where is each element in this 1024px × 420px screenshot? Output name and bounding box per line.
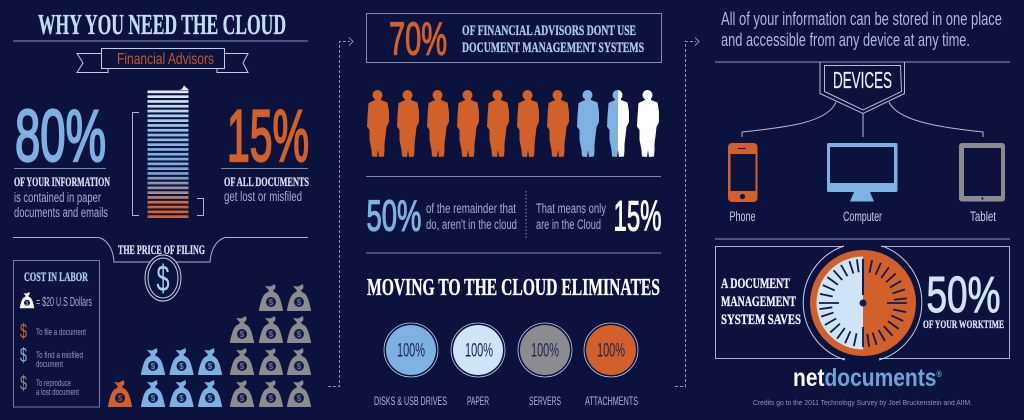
legend: cost in labor: document (36, 359, 63, 369)
text block: document management system saves: MANAGEMENT (721, 294, 796, 310)
badge: disks and usb drives: 100% (397, 340, 425, 362)
text block: document management system saves (721, 276, 801, 328)
chart: people pictogram (367, 90, 659, 157)
icon: dollar medallion: $ (156, 258, 170, 299)
stat: only 15 percent (536, 192, 662, 240)
bags: gray: $ (269, 298, 274, 307)
bags: gray: $ (240, 394, 245, 403)
heading tab: the price of filing: THE PRICE OF FILING (118, 242, 205, 257)
icon: tablet: Tablet (970, 209, 996, 224)
legend: cost in labor: $ (20, 345, 27, 367)
stat: 50 percent of remainder: 50% (366, 192, 422, 240)
stat: 80 percent: 80% (15, 96, 106, 177)
legend: cost in labor: = $20 U.S Dollars (36, 295, 92, 309)
badge: servers: SERVERS (529, 394, 561, 408)
callout: 70 percent: 70% (389, 12, 447, 64)
icon: clock (803, 246, 922, 360)
legend: cost in labor (14, 260, 100, 407)
connector lines to devices (742, 102, 983, 137)
heading badge: devices: DEVICES (833, 67, 892, 93)
credits: Credits go to the 2011 Technology Survey by Joel Bruckenstein and AIIM. (753, 400, 972, 407)
legend: cost in labor: To file a document (36, 327, 86, 337)
stat: 15 percent: OF ALL DOCUMENTS (224, 174, 309, 189)
panel: devices (715, 8, 1010, 239)
bags: gray: $ (297, 298, 302, 307)
legend: cost in labor: COST IN LABOR (24, 269, 88, 284)
bags: gray: $ (240, 362, 245, 371)
icon: tablet (959, 143, 1005, 224)
heading tab: the price of filing (13, 238, 308, 262)
stat: 15 percent: get lost or misfiled (224, 189, 302, 204)
stat: 50 percent of remainder: do, aren't in the cloud (426, 217, 517, 232)
icon: white money bag (20, 292, 34, 308)
bag: orange (108, 380, 132, 407)
stat: 15 percent: 15% (227, 96, 309, 177)
badge: disks and usb drives (374, 323, 447, 408)
callout: 70 percent: OF FINANCIAL ADVISORS DONT USE (462, 23, 636, 39)
stat: 80 percent (14, 96, 110, 220)
legend: cost in labor: $ (20, 373, 27, 395)
bags: blue: $ (151, 362, 156, 371)
bags: gray: $ (297, 394, 302, 403)
badge: servers (518, 323, 572, 408)
logo: netdocuments: netdocuments (793, 364, 958, 392)
text block: document management system saves: SYSTEM SAVES (721, 312, 801, 328)
legend: cost in labor: a lost document (36, 387, 79, 397)
stat: 80 percent: OF YOUR INFORMATION (14, 174, 110, 189)
stat: only 15 percent: are in the Cloud (536, 217, 601, 232)
bags: gray: $ (240, 330, 245, 339)
banner: financial advisors: Financial Advisors (117, 51, 214, 68)
bags: blue: $ (179, 362, 184, 371)
arrow: center to right connector (675, 38, 699, 386)
panel: why you need the cloud (13, 10, 309, 220)
badge: paper: PAPER (467, 394, 489, 408)
badge: attachments (584, 323, 638, 408)
bags: blue: $ (151, 394, 156, 403)
stat: only 15 percent: 15% (614, 192, 662, 240)
text block: document management system saves: A DOCUMENT (721, 276, 790, 292)
badge: disks and usb drives: DISKS & USB DRIVES (374, 394, 447, 408)
stat: 50 percent of remainder: of the remainder that (426, 201, 516, 216)
stat: 50 percent of your worktime (923, 266, 1004, 331)
stat: 15 percent (221, 96, 309, 204)
chart: money bags (108, 284, 311, 407)
frame around clock (716, 246, 1010, 358)
icon: dollar medallion (145, 255, 181, 301)
bags: blue (141, 348, 222, 407)
badge: attachments: ATTACHMENTS (585, 394, 638, 408)
bags: gray: $ (297, 362, 302, 371)
legend: cost in labor: $ (20, 321, 27, 343)
badge: servers: 100% (531, 340, 559, 362)
legend: cost in labor: To find a misfiled (36, 350, 83, 360)
bags: blue: $ (208, 362, 213, 371)
bag: orange: $ (118, 394, 123, 403)
bags: gray: $ (297, 330, 302, 339)
icon: phone: Phone (730, 209, 756, 224)
banner: financial advisors (77, 48, 248, 72)
chart: document stack (132, 85, 204, 218)
stat: 80 percent: documents and emails (14, 205, 108, 220)
callout: 70 percent: DOCUMENT MANAGEMENT SYSTEMS (462, 40, 644, 56)
panel: adoption statistics (366, 12, 662, 408)
title: WHY YOU NEED THE CLOUD (38, 10, 286, 41)
bags: blue: $ (208, 394, 213, 403)
panel: worktime savings (716, 246, 1010, 360)
bags: gray: $ (269, 362, 274, 371)
stat: only 15 percent: That means only (536, 201, 606, 216)
stat: 80 percent: is contained in paper (14, 190, 101, 205)
bags: gray (230, 284, 311, 407)
chart: eliminated items (374, 323, 638, 408)
bags: blue: $ (179, 394, 184, 403)
heading: moving to the cloud eliminates: MOVING TO THE CLOUD ELIMINATES (367, 275, 660, 301)
badge: paper: 100% (465, 340, 493, 362)
bags: gray: $ (269, 394, 274, 403)
text block: storage intro (721, 8, 1002, 50)
panel: the price of filing (13, 238, 311, 407)
badge: attachments: 100% (597, 340, 625, 362)
arrow: left to center connector (328, 38, 353, 386)
legend: cost in labor: To reproduce (36, 378, 71, 388)
logo: netdocuments: ® (936, 369, 942, 379)
heading badge: devices (820, 62, 904, 114)
callout: 70 percent (366, 12, 662, 64)
icon: computer: Computer (843, 209, 882, 224)
bags: gray: $ (269, 330, 274, 339)
icon: phone (728, 143, 758, 224)
badge: paper (451, 323, 505, 408)
stat: 50 percent of remainder (366, 192, 517, 240)
icon: computer (827, 143, 898, 224)
icon: white money bag: $ (26, 301, 29, 307)
